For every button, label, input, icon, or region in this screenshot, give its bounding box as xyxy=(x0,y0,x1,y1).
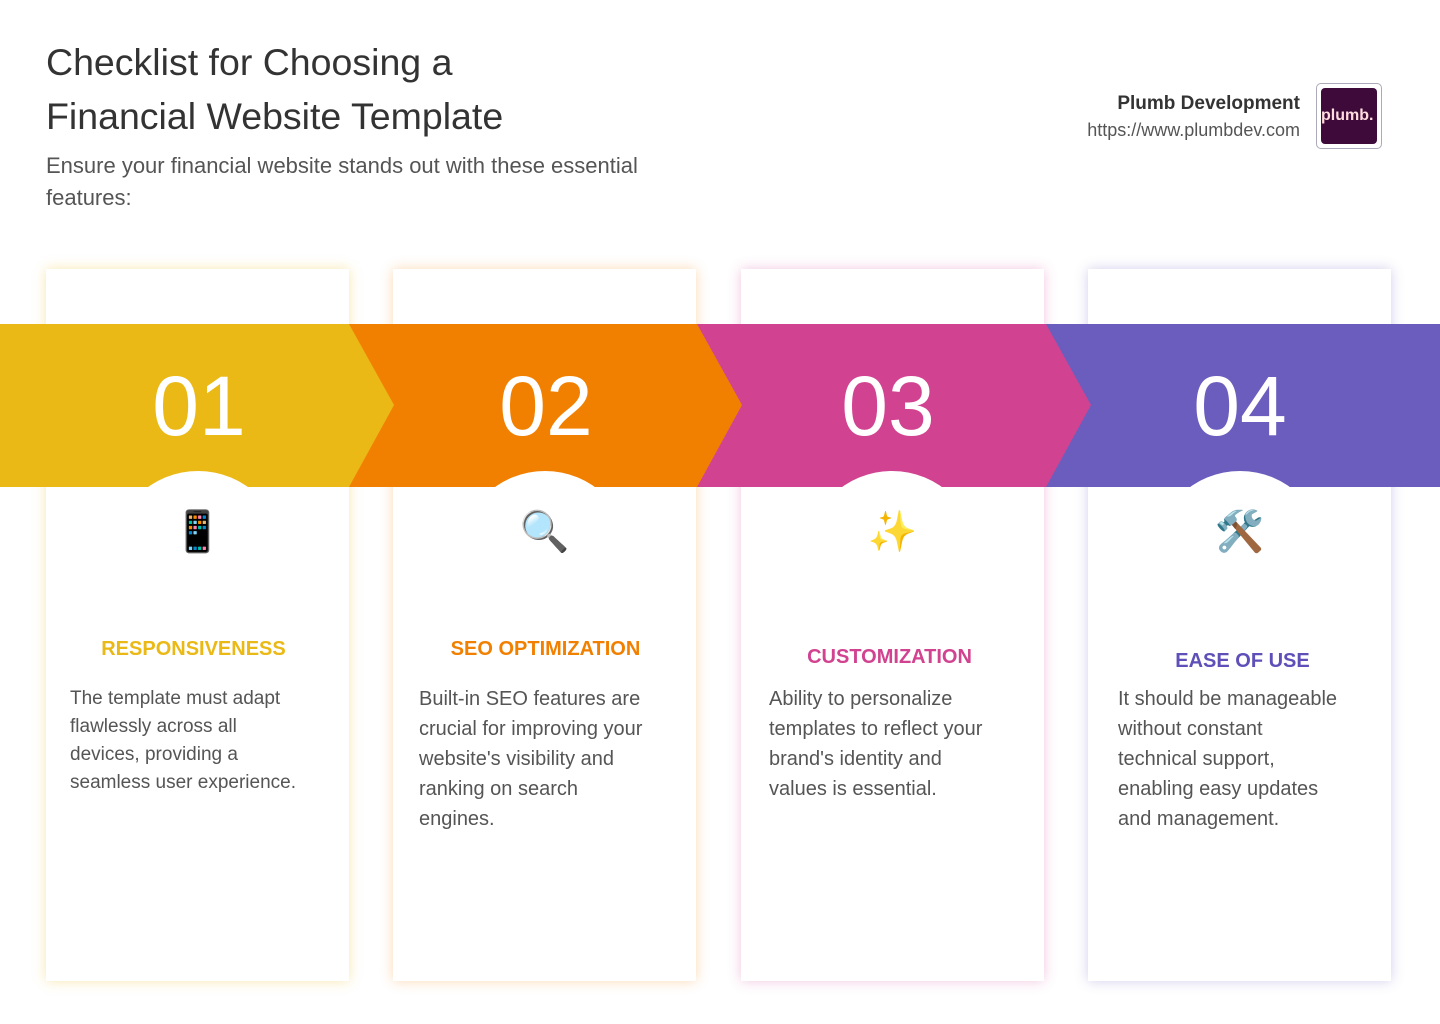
icon: phone: 📱 xyxy=(173,508,222,555)
subtitle: Ensure your financial website stands out with these essential features: xyxy=(46,153,638,210)
icon: sparkles: ✨ xyxy=(868,508,917,555)
card 4 xyxy=(1088,269,1391,981)
logo: plumb. xyxy=(1321,107,1373,124)
heading 3: CUSTOMIZATION xyxy=(807,646,972,668)
card 1 xyxy=(46,269,349,981)
title: Financial Website Template xyxy=(46,95,503,137)
icon: magnifier: 🔍 xyxy=(520,508,569,555)
banner arrows: 04 xyxy=(1193,359,1287,453)
title xyxy=(46,41,503,137)
logo xyxy=(1316,83,1382,149)
card 2 xyxy=(393,269,696,981)
brand name: Plumb Development xyxy=(1117,93,1300,114)
brand block xyxy=(1087,83,1382,149)
heading 4: EASE OF USE xyxy=(1175,650,1310,672)
icon: tools: 🛠 xyxy=(1215,508,1264,555)
heading 2: SEO OPTIMIZATION xyxy=(451,638,640,660)
brand url: https://www.plumbdev.com xyxy=(1087,120,1300,140)
text 4: It should be manageable without constant technical support, enabling easy updates and management. xyxy=(1118,688,1337,830)
title: Checklist for Choosing a xyxy=(46,41,452,83)
text 3: Ability to personalize templates to reflect your brand's identity and values is essential. xyxy=(769,688,982,800)
text 1: The template must adapt flawlessly across all devices, providing a seamless user experience. xyxy=(70,688,296,793)
banner arrows: 03 xyxy=(841,359,935,453)
text 2: Built-in SEO features are crucial for improving your website's visibility and ranking on search engines. xyxy=(419,688,642,830)
card 3 xyxy=(741,269,1044,981)
banner arrows: 02 xyxy=(499,359,593,453)
heading 1: RESPONSIVENESS xyxy=(101,638,286,660)
banner arrows: 01 xyxy=(152,359,246,453)
